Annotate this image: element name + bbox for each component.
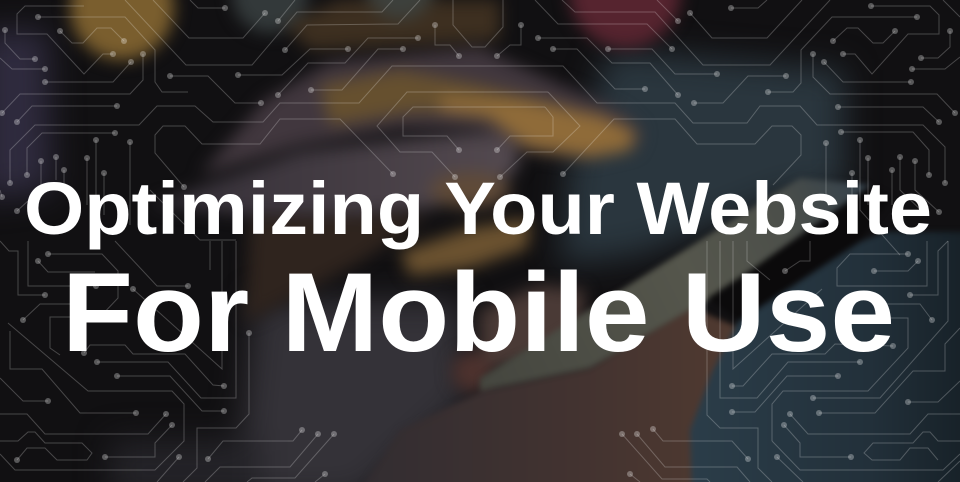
lit finger (400, 218, 530, 276)
title (24, 167, 932, 375)
reddish fingertip behind the phone (480, 285, 585, 372)
hand shadow (245, 216, 430, 322)
upper finger, warm underside (320, 70, 630, 155)
title line 2: For Mobile Use (62, 250, 895, 375)
phone screen (480, 178, 870, 391)
bokeh lights (70, 0, 174, 60)
phone body (708, 187, 892, 320)
teal table (690, 232, 960, 482)
thumb (150, 133, 520, 215)
title line 1: Optimizing Your Website (24, 167, 932, 250)
fingertip highlight (440, 96, 636, 157)
lower hand (360, 308, 735, 482)
upper finger, mauve top (200, 48, 642, 175)
